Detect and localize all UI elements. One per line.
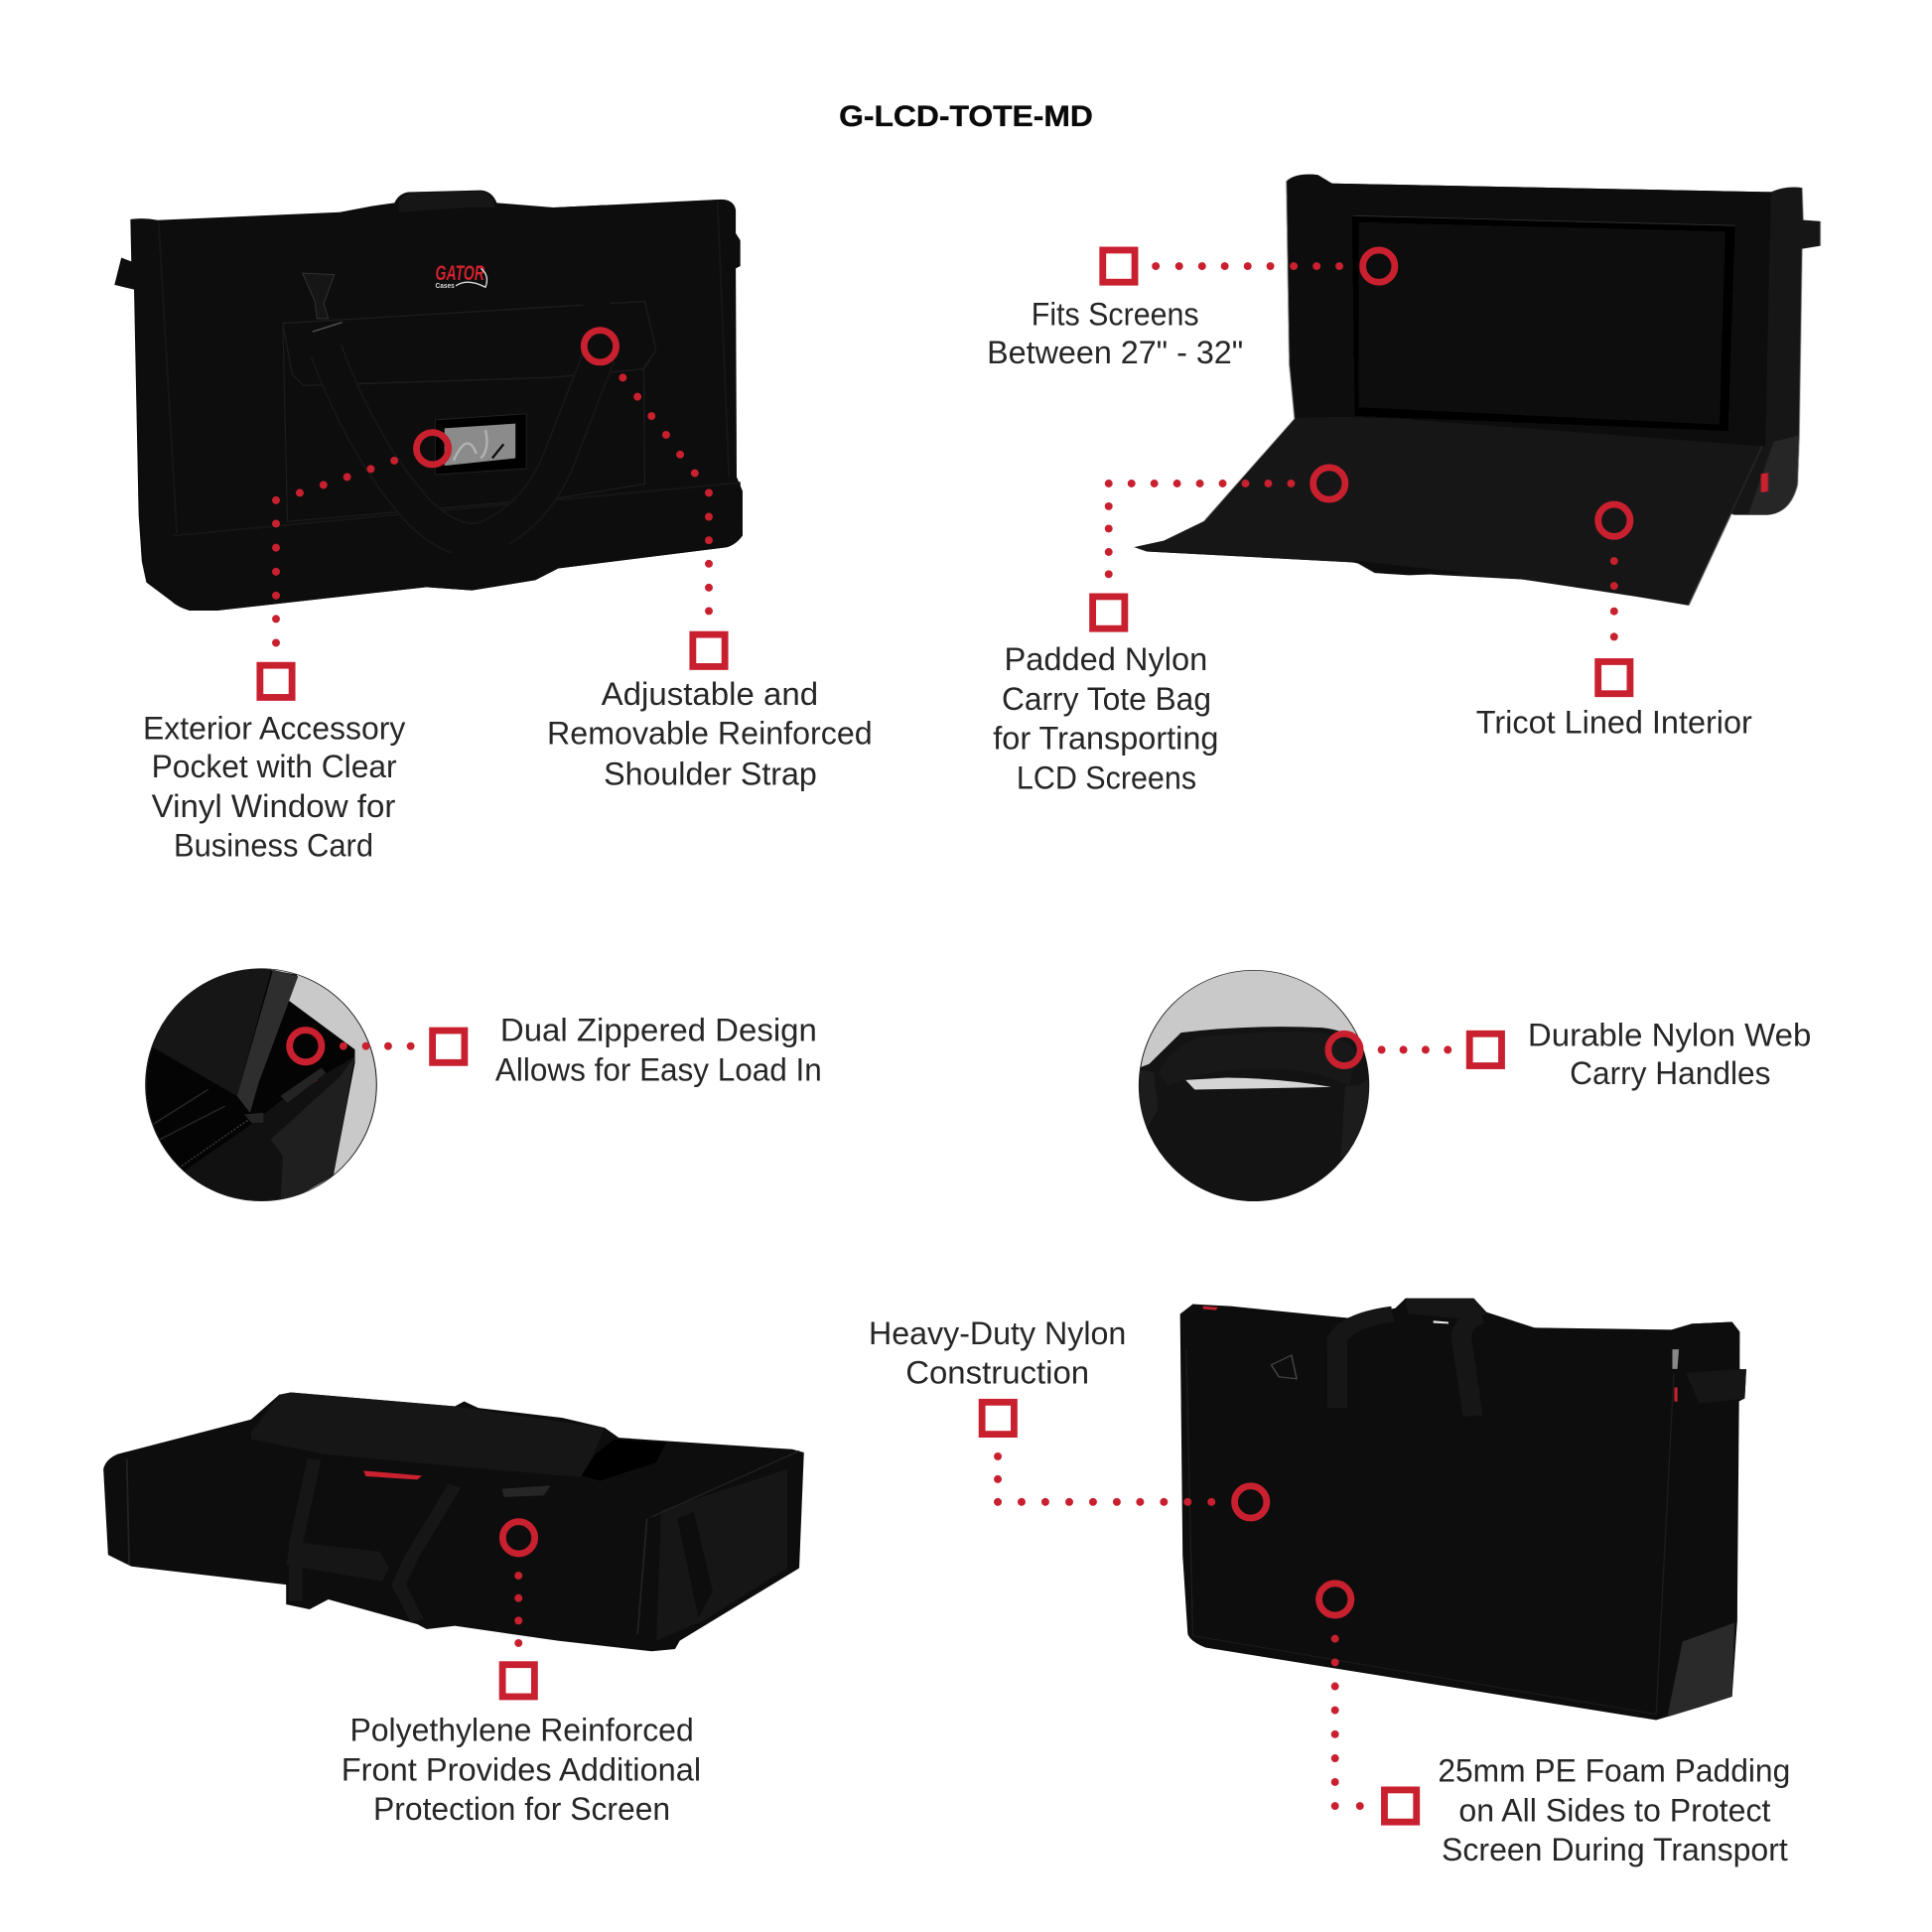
photo: circular handle close-up xyxy=(1136,970,1372,1205)
label: durable nylon web handles: Carry Handles xyxy=(1570,1055,1770,1091)
label: heavy-duty nylon construction: Construction xyxy=(905,1355,1089,1391)
hotspot and leader: shoulder strap xyxy=(584,331,725,666)
hotspot and leader: foam padding xyxy=(1319,1584,1417,1822)
label: foam padding xyxy=(1438,1753,1790,1867)
hotspot and leader: zipper xyxy=(290,1031,465,1062)
label: padded nylon tote: Carry Tote Bag xyxy=(1002,681,1211,717)
photo: open tote bag with LCD screen xyxy=(1134,175,1821,606)
label: polyethylene reinforced front: Protection for Screen xyxy=(373,1791,670,1827)
label: exterior accessory pocket: Vinyl Window for xyxy=(152,788,396,824)
panel: zipper detail xyxy=(145,968,820,1201)
label: shoulder strap: Removable Reinforced xyxy=(547,716,873,752)
hotspot and leader: polyethylene front xyxy=(502,1522,535,1697)
photo: closed tote bag front: Cases xyxy=(436,283,455,290)
label: polyethylene reinforced front: Front Provides Additional xyxy=(342,1751,701,1787)
label: exterior accessory pocket: Exterior Accessory xyxy=(143,711,406,747)
panel: bag lying flat xyxy=(103,1393,804,1827)
photo: tote bag lying flat xyxy=(103,1393,804,1651)
label: foam padding: 25mm PE Foam Padding xyxy=(1438,1753,1790,1789)
label: padded nylon tote xyxy=(993,641,1218,795)
label: heavy-duty nylon construction: Heavy-Duty Nylon xyxy=(869,1315,1126,1351)
panel: bag open with screen inside xyxy=(987,175,1821,795)
label: padded nylon tote: for Transporting xyxy=(993,721,1218,757)
label: tricot lined interior: Tricot Lined Interior xyxy=(1476,704,1752,740)
label: exterior accessory pocket: Pocket with Clear xyxy=(152,749,397,784)
label: dual zippered design xyxy=(495,1013,822,1087)
label: shoulder strap xyxy=(547,676,873,792)
photo: closed tote bag front: GATOR xyxy=(436,261,484,285)
label: dual zippered design: Dual Zippered Design xyxy=(500,1013,817,1048)
panel: bag rear view xyxy=(869,1299,1790,1867)
label: fits screens: Between 27" - 32" xyxy=(987,335,1243,370)
photo: circular zipper close-up xyxy=(145,968,377,1201)
hotspot and leader: fits screens xyxy=(1103,250,1395,282)
label: fits screens xyxy=(987,297,1243,370)
hotspot and leader: exterior pocket xyxy=(260,433,449,697)
label: padded nylon tote: LCD Screens xyxy=(1017,759,1196,795)
hotspot and leader: heavy-duty nylon xyxy=(982,1402,1267,1518)
label: polyethylene reinforced front: Polyethylene Reinforced xyxy=(349,1713,694,1748)
hotspot and leader: carry handle xyxy=(1328,1034,1501,1066)
label: foam padding: on All Sides to Protect xyxy=(1458,1792,1770,1828)
label: dual zippered design: Allows for Easy Load In xyxy=(495,1051,822,1087)
photo: tote bag rear xyxy=(1180,1299,1746,1721)
label: durable nylon web handles xyxy=(1528,1018,1811,1091)
label: polyethylene reinforced front xyxy=(342,1713,701,1827)
hotspot and leader: padded nylon xyxy=(1093,468,1345,628)
label: shoulder strap: Shoulder Strap xyxy=(604,757,817,792)
panel: carry handle detail xyxy=(1136,970,1811,1205)
title: G-LCD-TOTE-MD xyxy=(839,100,1093,133)
label: padded nylon tote: Padded Nylon xyxy=(1004,641,1207,677)
label: exterior accessory pocket xyxy=(143,711,406,864)
label: heavy-duty nylon construction xyxy=(869,1315,1126,1391)
label: shoulder strap: Adjustable and xyxy=(602,676,818,712)
label: fits screens: Fits Screens xyxy=(1032,297,1199,333)
hotspot and leader: tricot lining xyxy=(1598,504,1630,694)
panel: bag front view with pocket and shoulder strap xyxy=(114,191,873,864)
label: exterior accessory pocket: Business Card xyxy=(174,828,373,864)
label: foam padding: Screen During Transport xyxy=(1442,1832,1788,1867)
label: durable nylon web handles: Durable Nylon Web xyxy=(1528,1018,1811,1053)
photo: closed tote bag front xyxy=(114,191,743,611)
